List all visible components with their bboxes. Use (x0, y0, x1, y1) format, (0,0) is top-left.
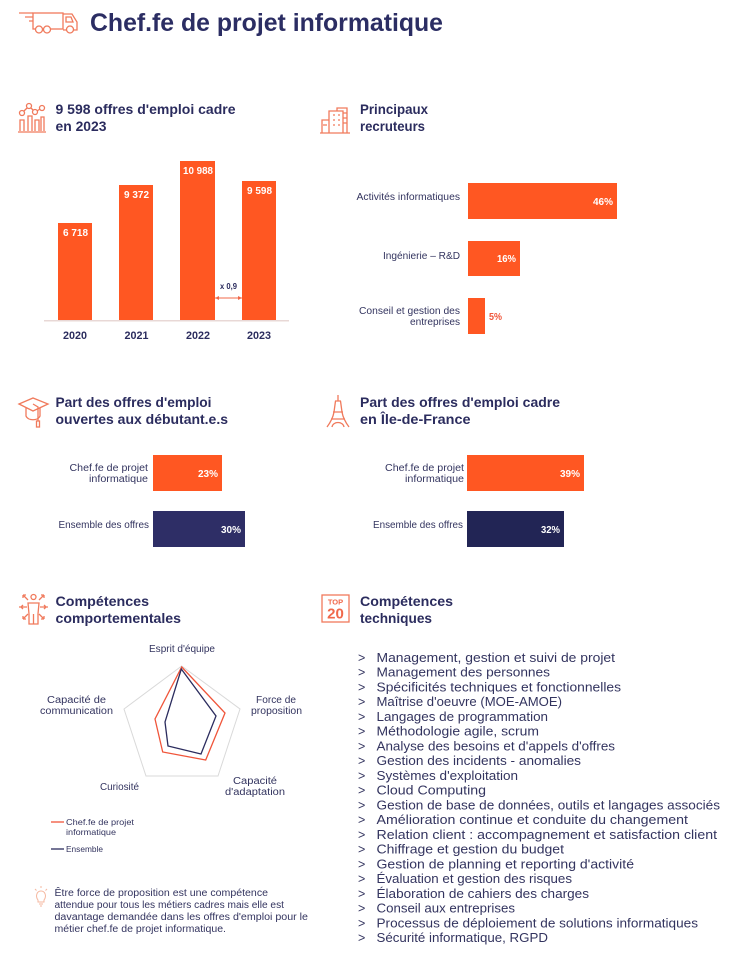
note text (54, 886, 308, 935)
list: top 20 technical skills: Amélioration continue et conduite du changement (376, 813, 689, 827)
list: top 20 technical skills: Méthodologie agile, scrum (376, 725, 539, 739)
bar chart: beginners: informatique (89, 474, 148, 485)
note text: métier chef.fe de projet informatique. (54, 924, 226, 935)
bar chart: Île-de-France: 39% (560, 468, 581, 480)
bar chart: recruiters: entreprises (410, 317, 460, 328)
list: top 20 technical skills: > (358, 784, 365, 798)
note text: attendue pour tous les métiers cadres mais elle est (54, 900, 284, 911)
list: top 20 technical skills: Spécificités techniques et fonctionnelles (376, 680, 621, 694)
bar chart: recruiters: 46% (593, 196, 614, 208)
list: top 20 technical skills: > (358, 872, 365, 886)
bar chart: beginners: 30% (221, 524, 242, 536)
radar chart: proposition (251, 706, 302, 717)
note text: davantage demandée dans les offres d'emploi pour le (54, 912, 308, 923)
panel: soft skills (19, 593, 308, 935)
bar chart: recruiters: Activités informatiques (356, 192, 460, 203)
radar chart: Force de (256, 695, 296, 706)
list: top 20 technical skills: Gestion de planning et reporting d'activité (376, 857, 634, 871)
bar chart: recruiters: 16% (497, 253, 517, 265)
list: top 20 technical skills: > (358, 666, 365, 680)
icon: Eiffel tower (327, 395, 349, 427)
arrow: x 0,9 evolution: x 0,9 (220, 281, 237, 291)
list: top 20 technical skills: Évaluation et gestion des risques (376, 871, 572, 886)
list: top 20 technical skills: > (358, 739, 365, 753)
heading (360, 593, 453, 626)
radar chart: communication (40, 706, 113, 717)
heading (56, 593, 181, 626)
heading: techniques (360, 610, 432, 626)
list: top 20 technical skills: Maîtrise d'oeuvre (MOE-AMOE) (376, 695, 562, 709)
list: top 20 technical skills: > (358, 931, 365, 945)
heading (56, 101, 236, 134)
icon: buildings (320, 108, 350, 133)
list: top 20 technical skills: > (358, 651, 365, 665)
heading (360, 101, 428, 134)
list: top 20 technical skills: Sécurité informatique, RGPD (376, 931, 548, 945)
bar chart: beginners: Chef.fe de projet (70, 463, 148, 474)
list: top 20 technical skills: > (358, 828, 365, 842)
list: top 20 technical skills: Conseil aux entreprises (376, 902, 515, 916)
panel: offers open to beginners (19, 394, 245, 547)
bar chart: Île-de-France (373, 455, 584, 547)
legend (51, 817, 135, 854)
list: top 20 technical skills: Gestion des incidents - anomalies (376, 754, 581, 768)
legend: informatique (66, 827, 116, 837)
title: Chef.fe de projet informatique (90, 9, 443, 37)
heading: Part des offres d'emploi cadre (360, 394, 560, 410)
heading: comportementales (56, 610, 181, 626)
panel: main recruiters (320, 101, 617, 334)
heading: Compétences (56, 593, 149, 609)
list: top 20 technical skills: > (358, 902, 365, 916)
list: top 20 technical skills: Langages de programmation (376, 710, 548, 724)
list: top 20 technical skills: > (358, 887, 365, 901)
list: top 20 technical skills: > (358, 710, 365, 724)
radar chart: Esprit d'équipe (149, 644, 215, 655)
bar chart: offers by year: 2021 (124, 330, 148, 342)
list: top 20 technical skills: > (358, 754, 365, 768)
list: top 20 technical skills: > (358, 769, 365, 783)
heading: recruteurs (360, 118, 425, 134)
bar chart: recruiters: Conseil et gestion des (359, 306, 460, 317)
icon: top 20 badge: TOP (328, 598, 343, 606)
heading: Compétences (360, 593, 453, 609)
list: top 20 technical skills: > (358, 857, 365, 871)
list: top 20 technical skills: Chiffrage et gestion du budget (376, 843, 565, 857)
radar chart: d'adaptation (225, 787, 285, 798)
heading: 9 598 offres d'emploi cadre (56, 101, 236, 117)
legend: Ensemble (66, 844, 103, 854)
heading: en Île-de-France (360, 410, 471, 427)
list: top 20 technical skills: > (358, 725, 365, 739)
icon: person with arrows (19, 594, 48, 624)
list: top 20 technical skills: > (358, 798, 365, 812)
icon: graduation cap (19, 398, 48, 427)
list: top 20 technical skills: Systèmes d'exploitation (376, 769, 518, 783)
list: top 20 technical skills: Management, gestion et suivi de projet (376, 651, 616, 665)
radar chart: Capacité de (47, 695, 106, 706)
bar chart: recruiters: Ingénierie – R&D (383, 251, 460, 262)
bar chart: recruiters (356, 183, 617, 334)
heading: ouvertes aux débutant.e.s (56, 411, 228, 427)
list: top 20 technical skills: > (358, 813, 365, 827)
list: top 20 technical skills: > (358, 843, 365, 857)
radar chart: Capacité (233, 776, 277, 787)
bar chart: offers by year: 6 718 (63, 228, 88, 239)
heading: Principaux (360, 101, 428, 117)
bar chart: recruiters: 5% (489, 311, 503, 323)
list: top 20 technical skills: > (358, 916, 365, 930)
panel: job offers 2023 (18, 101, 289, 342)
radar chart: Curiosité (100, 782, 139, 793)
legend: Chef.fe de projet (66, 817, 135, 827)
list: top 20 technical skills: Management des personnes (376, 666, 550, 680)
icon: top 20 badge: 20 (327, 606, 344, 622)
bar chart: offers by year: 10 988 (183, 166, 213, 177)
bar chart: beginners (58, 455, 245, 547)
bar chart: beginners: 23% (198, 468, 219, 480)
icon: top 20 badge (322, 595, 349, 622)
icon: chart (18, 104, 46, 132)
bar chart: offers by year: 2023 (247, 330, 271, 342)
radar chart (40, 644, 302, 798)
list: top 20 technical skills: > (358, 680, 365, 694)
arrow: x 0,9 evolution (215, 281, 242, 300)
list: top 20 technical skills: > (358, 695, 365, 709)
bar chart: offers by year: 9 598 (247, 186, 272, 197)
icon: light bulb (35, 886, 47, 906)
icon: delivery truck (19, 13, 77, 33)
bar chart: Île-de-France: informatique (405, 474, 464, 485)
bar chart: offers by year: 2020 (63, 330, 87, 342)
list: top 20 technical skills: Élaboration de cahiers des charges (376, 886, 589, 901)
bar chart: beginners: Ensemble des offres (58, 520, 149, 531)
heading: Part des offres d'emploi (56, 394, 212, 410)
list: top 20 technical skills: Cloud Computing (376, 784, 486, 798)
panel: offers in Île-de-France (327, 394, 584, 547)
note text: Être force de proposition est une compétence (54, 886, 268, 899)
bar chart: Île-de-France: Ensemble des offres (373, 520, 463, 531)
bar chart: offers by year: 2022 (186, 330, 210, 342)
bar chart: Île-de-France: Chef.fe de projet (385, 463, 464, 474)
panel: technical skills (322, 593, 720, 945)
list: top 20 technical skills (358, 651, 720, 945)
list: top 20 technical skills: Relation client : accompagnement et satisfaction client (376, 828, 718, 842)
heading (360, 394, 560, 427)
bar chart: offers by year: 9 372 (124, 190, 149, 201)
list: top 20 technical skills: Gestion de base de données, outils et langages associés (376, 798, 720, 812)
heading: en 2023 (56, 118, 107, 134)
bar chart: Île-de-France: 32% (541, 524, 561, 536)
list: top 20 technical skills: Analyse des besoins et d'appels d'offres (376, 739, 615, 753)
list: top 20 technical skills: Processus de déploiement de solutions informatiques (376, 916, 698, 930)
heading (56, 394, 228, 427)
bar chart: offers by year (44, 161, 289, 342)
